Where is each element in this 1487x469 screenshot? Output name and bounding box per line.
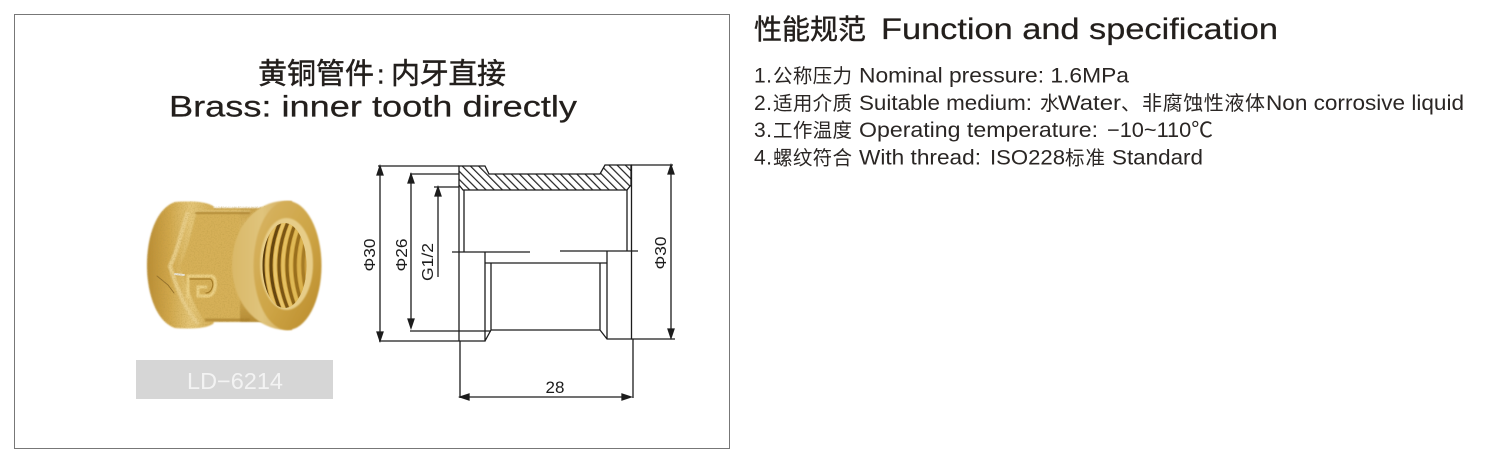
spec: nominal pressure: 公称压力 xyxy=(773,66,852,88)
panel: product frame xyxy=(14,14,730,448)
spec: suitable medium: 2. xyxy=(754,92,772,115)
spec: suitable medium: Suitable medium: xyxy=(859,92,1032,115)
spec: operating temperature: −10~110℃ xyxy=(1107,119,1213,142)
dimension: G1/2 thread: G1/2 xyxy=(420,243,437,281)
ring front face xyxy=(254,201,322,330)
spec: thread standard: ISO228 xyxy=(990,146,1065,170)
hatched wall section xyxy=(459,165,631,190)
spec: suitable medium: Non corrosive liquid xyxy=(1266,92,1464,115)
title line: Chinese: 黄铜管件 xyxy=(258,58,374,90)
spec: suitable medium: 适用介质 xyxy=(773,93,852,115)
body outline xyxy=(459,165,632,341)
spec: thread standard xyxy=(754,146,1203,170)
spec: operating temperature: 工作温度 xyxy=(773,120,852,142)
internal thread xyxy=(262,223,306,308)
dimension: 26 diameter xyxy=(394,174,414,328)
dimension: outer diameter left xyxy=(362,166,383,341)
fitting end ring xyxy=(232,201,292,330)
spec: nominal pressure xyxy=(754,64,1129,88)
specification list xyxy=(754,64,1464,170)
title: product name xyxy=(169,58,577,124)
title line: Chinese: 内牙直接 xyxy=(391,58,506,90)
heading: function and specification: Function and specification xyxy=(881,13,1278,46)
dimension: outer diameter right: Φ30 xyxy=(653,236,670,270)
technical drawing: section view with dimensions xyxy=(362,165,675,400)
heading: function and specification: 性能规范 xyxy=(754,14,866,45)
photo: brass pipe fitting xyxy=(147,201,322,330)
spec: suitable medium: Water xyxy=(1058,92,1121,115)
spec: operating temperature xyxy=(754,119,1213,142)
spec: thread standard: 标准 xyxy=(1065,148,1105,170)
dimension: length 28 xyxy=(460,378,631,400)
center line xyxy=(452,251,638,252)
spec: suitable medium xyxy=(754,92,1464,115)
fitting body xyxy=(147,201,268,329)
dimension: outer diameter right xyxy=(653,165,674,338)
dimension: 26 diameter: Φ26 xyxy=(394,238,411,272)
dimension: G1/2 thread xyxy=(420,187,441,281)
title line: Chinese xyxy=(258,58,506,90)
model label: LD-6214: LD−6214 xyxy=(187,368,283,394)
extension lines xyxy=(378,165,675,398)
spec: operating temperature: 3. xyxy=(754,119,772,142)
spec: nominal pressure: Nominal pressure: 1.6MPa xyxy=(859,64,1129,88)
spec: suitable medium: 、 xyxy=(1121,93,1141,115)
dimension: outer diameter left: Φ30 xyxy=(362,238,379,272)
spec: suitable medium: 非腐蚀性液体 xyxy=(1142,92,1265,115)
spec: thread standard: 4. xyxy=(754,146,772,170)
spec: thread standard: With thread: xyxy=(859,146,981,170)
title line: Chinese: : xyxy=(377,60,385,90)
heading: function and specification xyxy=(754,13,1278,46)
dimension: length 28: 28 xyxy=(546,378,564,397)
spec: nominal pressure: 1. xyxy=(754,64,772,88)
title line: English: Brass: inner tooth directly xyxy=(169,90,577,124)
casting grain xyxy=(147,201,268,328)
model label: LD-6214 xyxy=(136,360,333,399)
spec: suitable medium: 水 xyxy=(1040,93,1060,115)
inner chamfer xyxy=(260,218,313,310)
spec: thread standard: Standard xyxy=(1112,146,1203,170)
spec: operating temperature: Operating temperature: xyxy=(859,119,1098,142)
embossed logo xyxy=(157,274,215,297)
spec: thread standard: 螺纹符合 xyxy=(773,148,852,170)
